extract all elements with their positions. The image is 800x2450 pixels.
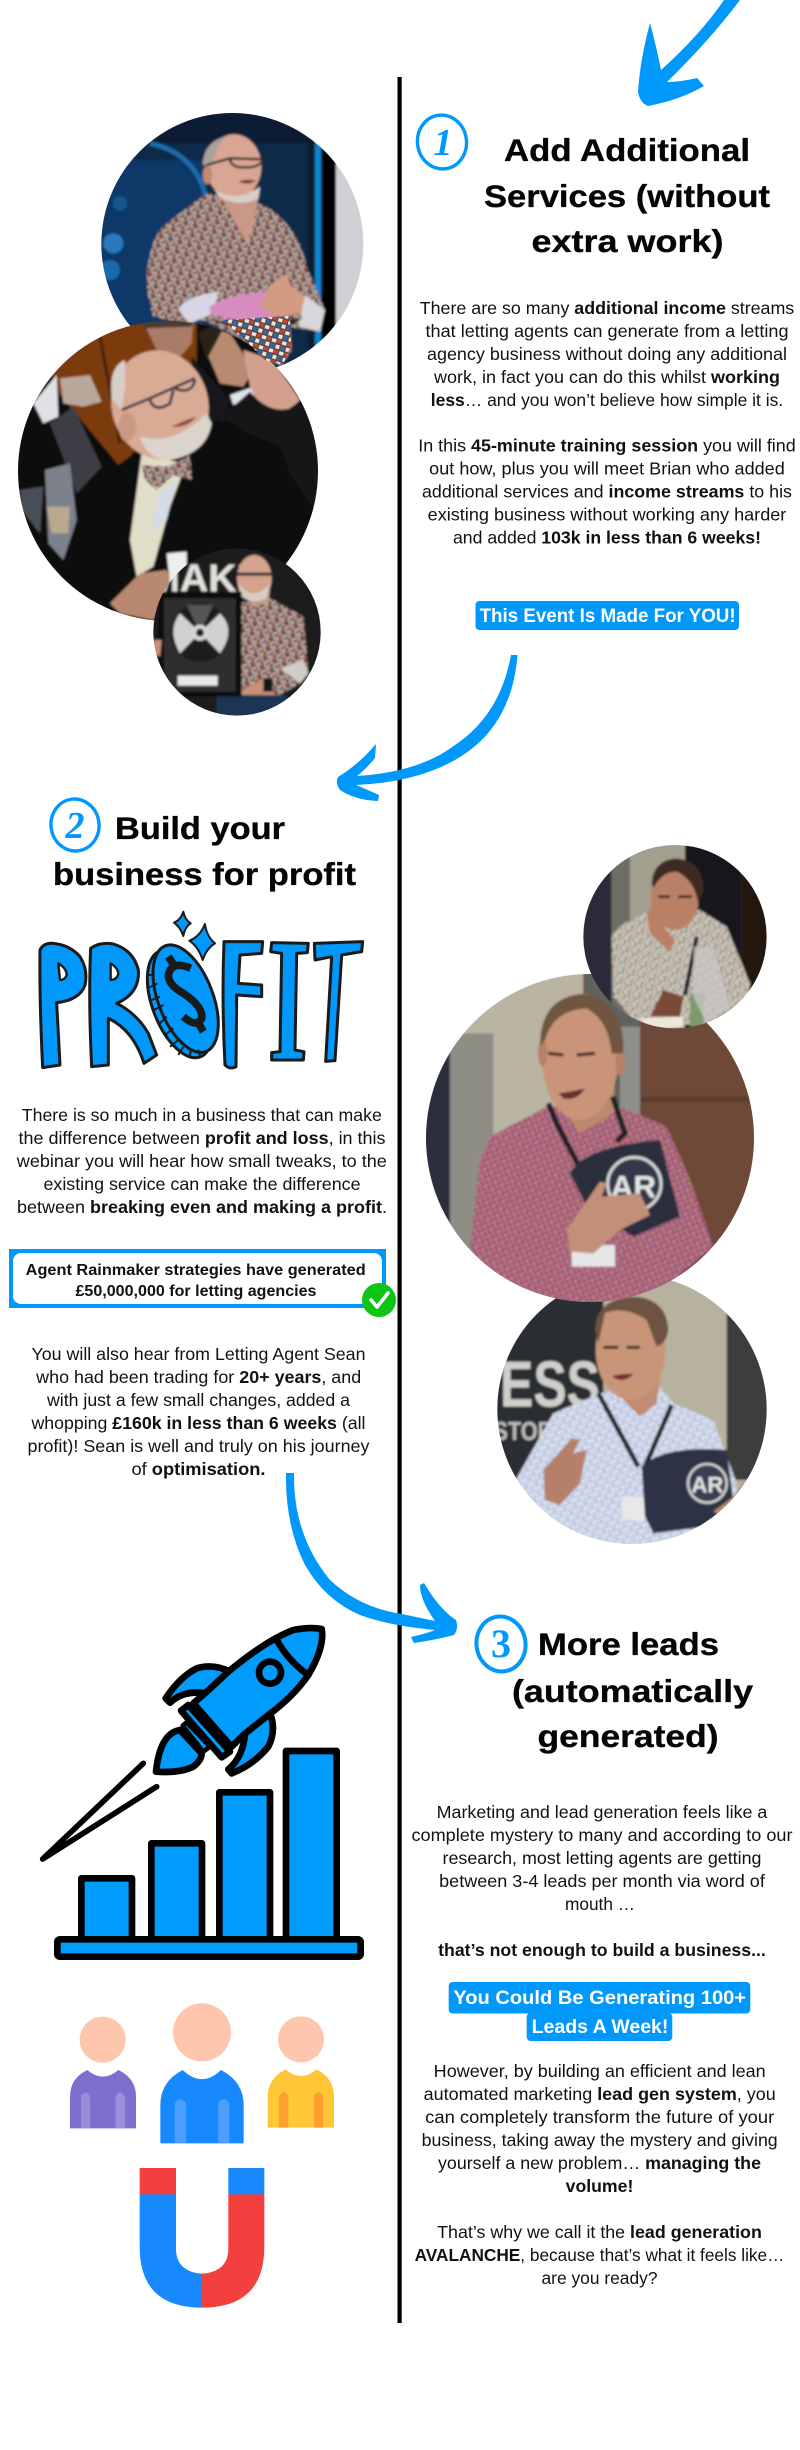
text block: training session (418, 436, 796, 548)
photo: Sean pointing: STOR (493, 1416, 554, 1446)
icon: blue person (160, 2003, 244, 2143)
photo: Sean pointing: ESS (500, 1348, 600, 1421)
text block: lead gen system: yourself a new problem… managing the (438, 2153, 761, 2173)
callout: generating 100 plus leads: Leads A Week! (532, 2017, 668, 2038)
text block: letting agent Sean (28, 1344, 370, 1479)
photo: speaker at dinner table (10, 320, 330, 630)
text block: lead gen system: However, by building an efficient and lean (434, 2061, 766, 2081)
text block: marketing mystery: between 3-4 leads per month via word of (439, 1871, 765, 1891)
icon: number 3 badge: 3 (491, 1621, 511, 1666)
text block: letting agent Sean: with just a few small changes, added a (46, 1390, 350, 1410)
text block: additional income: less… and you won’t believe how simple it is. (431, 390, 783, 410)
icon: rocket and bar chart (43, 1628, 361, 1957)
heading: build your business for profit (53, 810, 357, 892)
text block: training session: and added 103k in less than 6 weeks! (453, 528, 761, 548)
arrow: top arrow pointing down left (638, 0, 740, 106)
text block: profit and loss (16, 1105, 387, 1217)
text block: letting agent Sean: whopping £160k in less than 6 weeks (all (30, 1413, 365, 1433)
icon: number 2 badge (48, 796, 102, 854)
text block: marketing mystery (412, 1802, 793, 1914)
callout: agent rainmaker strategies box (9, 1249, 396, 1317)
photo: Sean pointing (497, 1280, 767, 1544)
text block: profit and loss: between breaking even and making a profit . (17, 1197, 387, 1217)
photos: letting agent Sean cluster (420, 840, 773, 1553)
text block: profit and loss: existing service can make the difference (44, 1174, 361, 1194)
text block: profit and loss: the difference between profit and loss, in this (18, 1128, 386, 1148)
arrow: curved arrow to section 2 (337, 655, 518, 801)
icon: horseshoe magnet (140, 2168, 264, 2308)
callout: generating 100 plus leads (449, 1982, 750, 2041)
heading: build your business for profit: business for profit (53, 856, 357, 892)
photo: shirt tail overlap (223, 316, 291, 365)
icon: number 1 badge: 1 (434, 122, 452, 164)
callout: generating 100 plus leads: You Could Be Generating 100+ (453, 1988, 746, 2009)
text block: letting agent Sean: profit)! Sean is well and truly on his journey (28, 1436, 370, 1456)
text block: marketing mystery: research, most letting agents are getting (442, 1848, 762, 1868)
heading: more leads automatically generated: More leads (538, 1626, 719, 1662)
panel: section 2 build your business for profit (9, 796, 396, 1479)
icon: three people (70, 2003, 334, 2143)
icon: purple person (70, 2017, 136, 2128)
heading: more leads automatically generated (512, 1626, 754, 1754)
icon: number 3 badge (473, 1613, 529, 1675)
heading: add additional services: Add Additional (504, 132, 750, 168)
text block: lead generation avalanche (415, 2222, 784, 2288)
text block: additional income: There are so many additional income streams (420, 298, 794, 318)
text block: lead gen system (422, 2061, 778, 2196)
text block: letting agent Sean: You will also hear from Letting Agent Sean (32, 1344, 365, 1364)
callout: agent rainmaker strategies box: Agent Rainmaker strategies have generated (26, 1262, 366, 1279)
text block: lead generation avalanche: That’s why we call it the lead generation (437, 2222, 762, 2242)
photos: speaker Brian cluster (10, 110, 368, 722)
heading: add additional services: Services (without (484, 178, 771, 214)
vertical divider line (398, 77, 402, 2323)
text block: additional income: that letting agents can generate from a letting (426, 321, 788, 341)
callout: this event is made for you: This Event Is Made For YOU! (480, 606, 736, 627)
text block: training session: out how, plus you will meet Brian who added (429, 458, 785, 478)
text block: marketing mystery: complete mystery to many and according to our (412, 1825, 793, 1845)
text block: lead generation avalanche: are you ready? (542, 2268, 658, 2288)
text block: training session: existing business without working any harder (428, 504, 786, 524)
icon: number 1 badge (414, 112, 470, 172)
text block: not enough: that’s not enough to build a business... (438, 1940, 766, 1960)
photo: speaker with award (147, 547, 323, 722)
text block: profit and loss: webinar you will hear how small tweaks, to the (16, 1151, 387, 1171)
panel: section 1 add additional services (414, 112, 796, 630)
icon: yellow person (268, 2016, 334, 2128)
text block: lead gen system: business, taking away the mystery and giving (422, 2130, 778, 2150)
panel: section 3 more leads (412, 1613, 793, 2288)
icon: green check (362, 1283, 396, 1317)
text block: lead gen system: volume! (566, 2176, 633, 2196)
photo: Sean resting on hand (580, 840, 770, 1033)
heading: add additional services: extra work) (532, 223, 724, 259)
heading: more leads automatically generated: (automatically (512, 1673, 754, 1709)
text block: profit and loss: There is so much in a business that can make (22, 1105, 382, 1125)
arrow: curved arrow to section 3 (286, 1473, 457, 1643)
text block: letting agent Sean: who had been trading for 20+ years, and (35, 1367, 361, 1387)
photo: speaker with award: MAKE (147, 557, 263, 601)
callout: agent rainmaker strategies box: £50,000,000 for letting agencies (76, 1283, 316, 1300)
text block: lead gen system: automated marketing lead gen system, you (424, 2084, 776, 2104)
text block: training session: additional services and income streams to his (422, 482, 792, 502)
text block: lead gen system: can completely transform the future of your (425, 2107, 774, 2127)
text block: additional income (420, 298, 794, 410)
heading: add additional services (484, 132, 771, 259)
text block: marketing mystery: Marketing and lead generation feels like a (437, 1802, 768, 1822)
photo: Sean with bag (420, 967, 760, 1307)
icon: number 2 badge: 2 (64, 805, 84, 847)
photo: Sean pointing: AR (691, 1473, 723, 1498)
icon: profit lettering (40, 912, 363, 1068)
photo: Sean with bag: AR (611, 1169, 656, 1204)
text block: training session: In this 45-minute training session you will find (418, 436, 796, 456)
text block: letting agent Sean: of optimisation. (132, 1459, 266, 1479)
text block: additional income: work, in fact you can do this whilst working (433, 367, 780, 387)
heading: build your business for profit: Build your (115, 810, 285, 846)
text block: marketing mystery: mouth … (565, 1894, 635, 1914)
heading: more leads automatically generated: generated) (538, 1718, 718, 1754)
text block: lead generation avalanche: AVALANCHE, because that’s what it feels like… (415, 2245, 784, 2265)
text block: additional income: agency business without doing any additional (427, 344, 787, 364)
photo: speaker on stage (90, 110, 368, 377)
